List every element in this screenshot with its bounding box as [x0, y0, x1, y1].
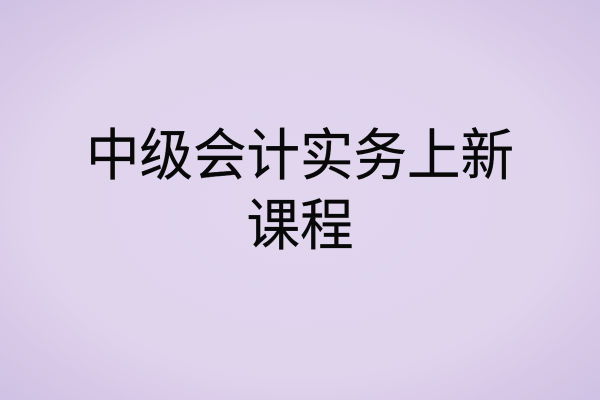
title line 2: 课程 [246, 196, 354, 257]
title [86, 126, 514, 257]
title line 1: 中级会计实务上新 [86, 126, 514, 187]
